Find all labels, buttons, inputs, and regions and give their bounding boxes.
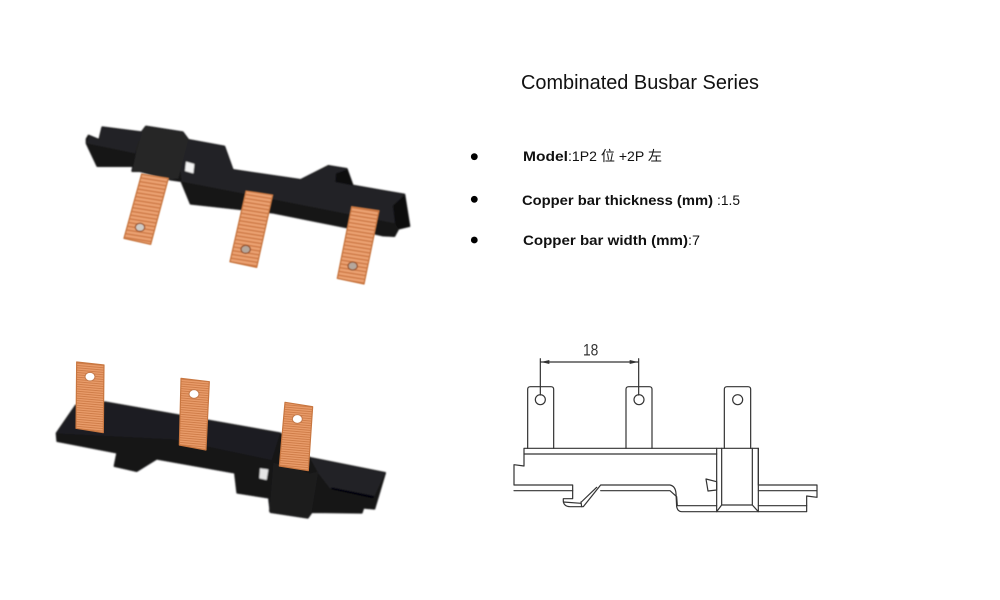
spec: copper bar width [471,232,700,248]
spec: model [471,148,662,164]
product photo: busbar top view [87,127,409,284]
busbar housing outline [514,448,817,512]
terminal tabs [528,387,751,448]
spec: model: Model [523,148,568,164]
product photo: busbar bottom view [57,362,385,518]
copper tab 2 [179,378,209,450]
copper tab 3 [279,402,313,471]
spec: copper bar thickness: :1.5 [717,192,740,208]
dimension: 18: 18 [583,340,598,359]
spec list [471,148,740,248]
spec: copper bar thickness: Copper bar thickness (mm) [522,192,713,208]
dimension: 18 [540,340,639,395]
spec: copper bar thickness [471,192,740,208]
copper tab 2 [230,191,273,267]
copper tab 3 [337,207,379,284]
copper tab 1 [124,174,168,244]
title: Combinated Busbar Series [521,72,759,94]
technical drawing [514,340,817,512]
copper tab 1 [76,362,104,433]
spec: model: :1P2 位 +2P 左 [568,148,662,164]
spec: copper bar width: :7 [688,232,700,248]
spec: copper bar width: Copper bar width (mm) [523,232,688,248]
